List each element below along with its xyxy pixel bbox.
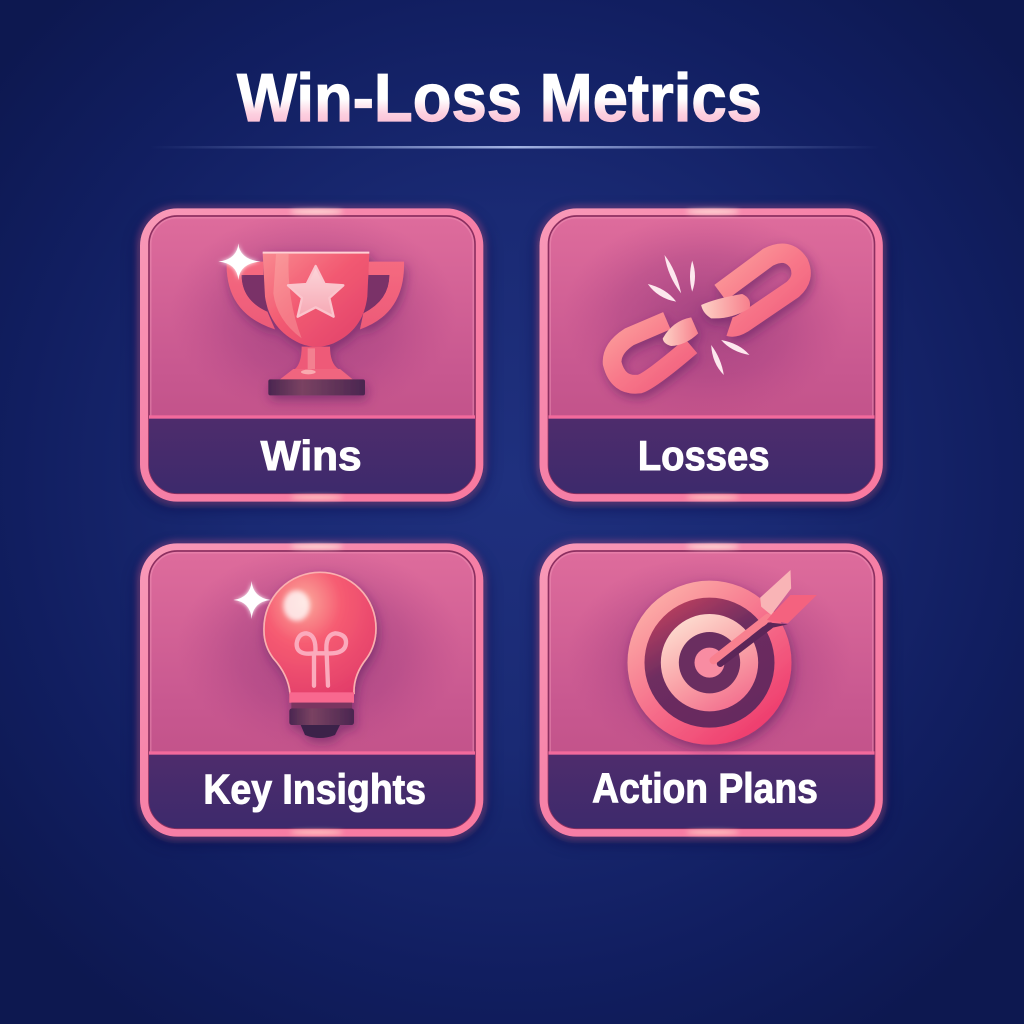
icon: sparkle [218, 243, 261, 280]
panel: losses [536, 208, 887, 508]
icon: break sparks [648, 255, 749, 375]
icon: trophy [227, 253, 404, 395]
icon: light bulb [264, 572, 376, 738]
panel: wins [137, 208, 487, 508]
title divider [150, 146, 880, 148]
icon: sparkle [233, 581, 271, 619]
label: action plans: Action Plans [592, 765, 818, 812]
icon: broken chain [612, 253, 801, 384]
panel: key insights [137, 543, 487, 843]
title: Win-Loss Metrics [237, 60, 762, 136]
icon: target [627, 581, 791, 745]
label: losses: Losses [638, 432, 769, 479]
label: wins: Wins [261, 432, 362, 479]
panel: action plans [536, 543, 887, 843]
label: key insights: Key Insights [203, 765, 426, 812]
icon: arrow [713, 570, 817, 664]
